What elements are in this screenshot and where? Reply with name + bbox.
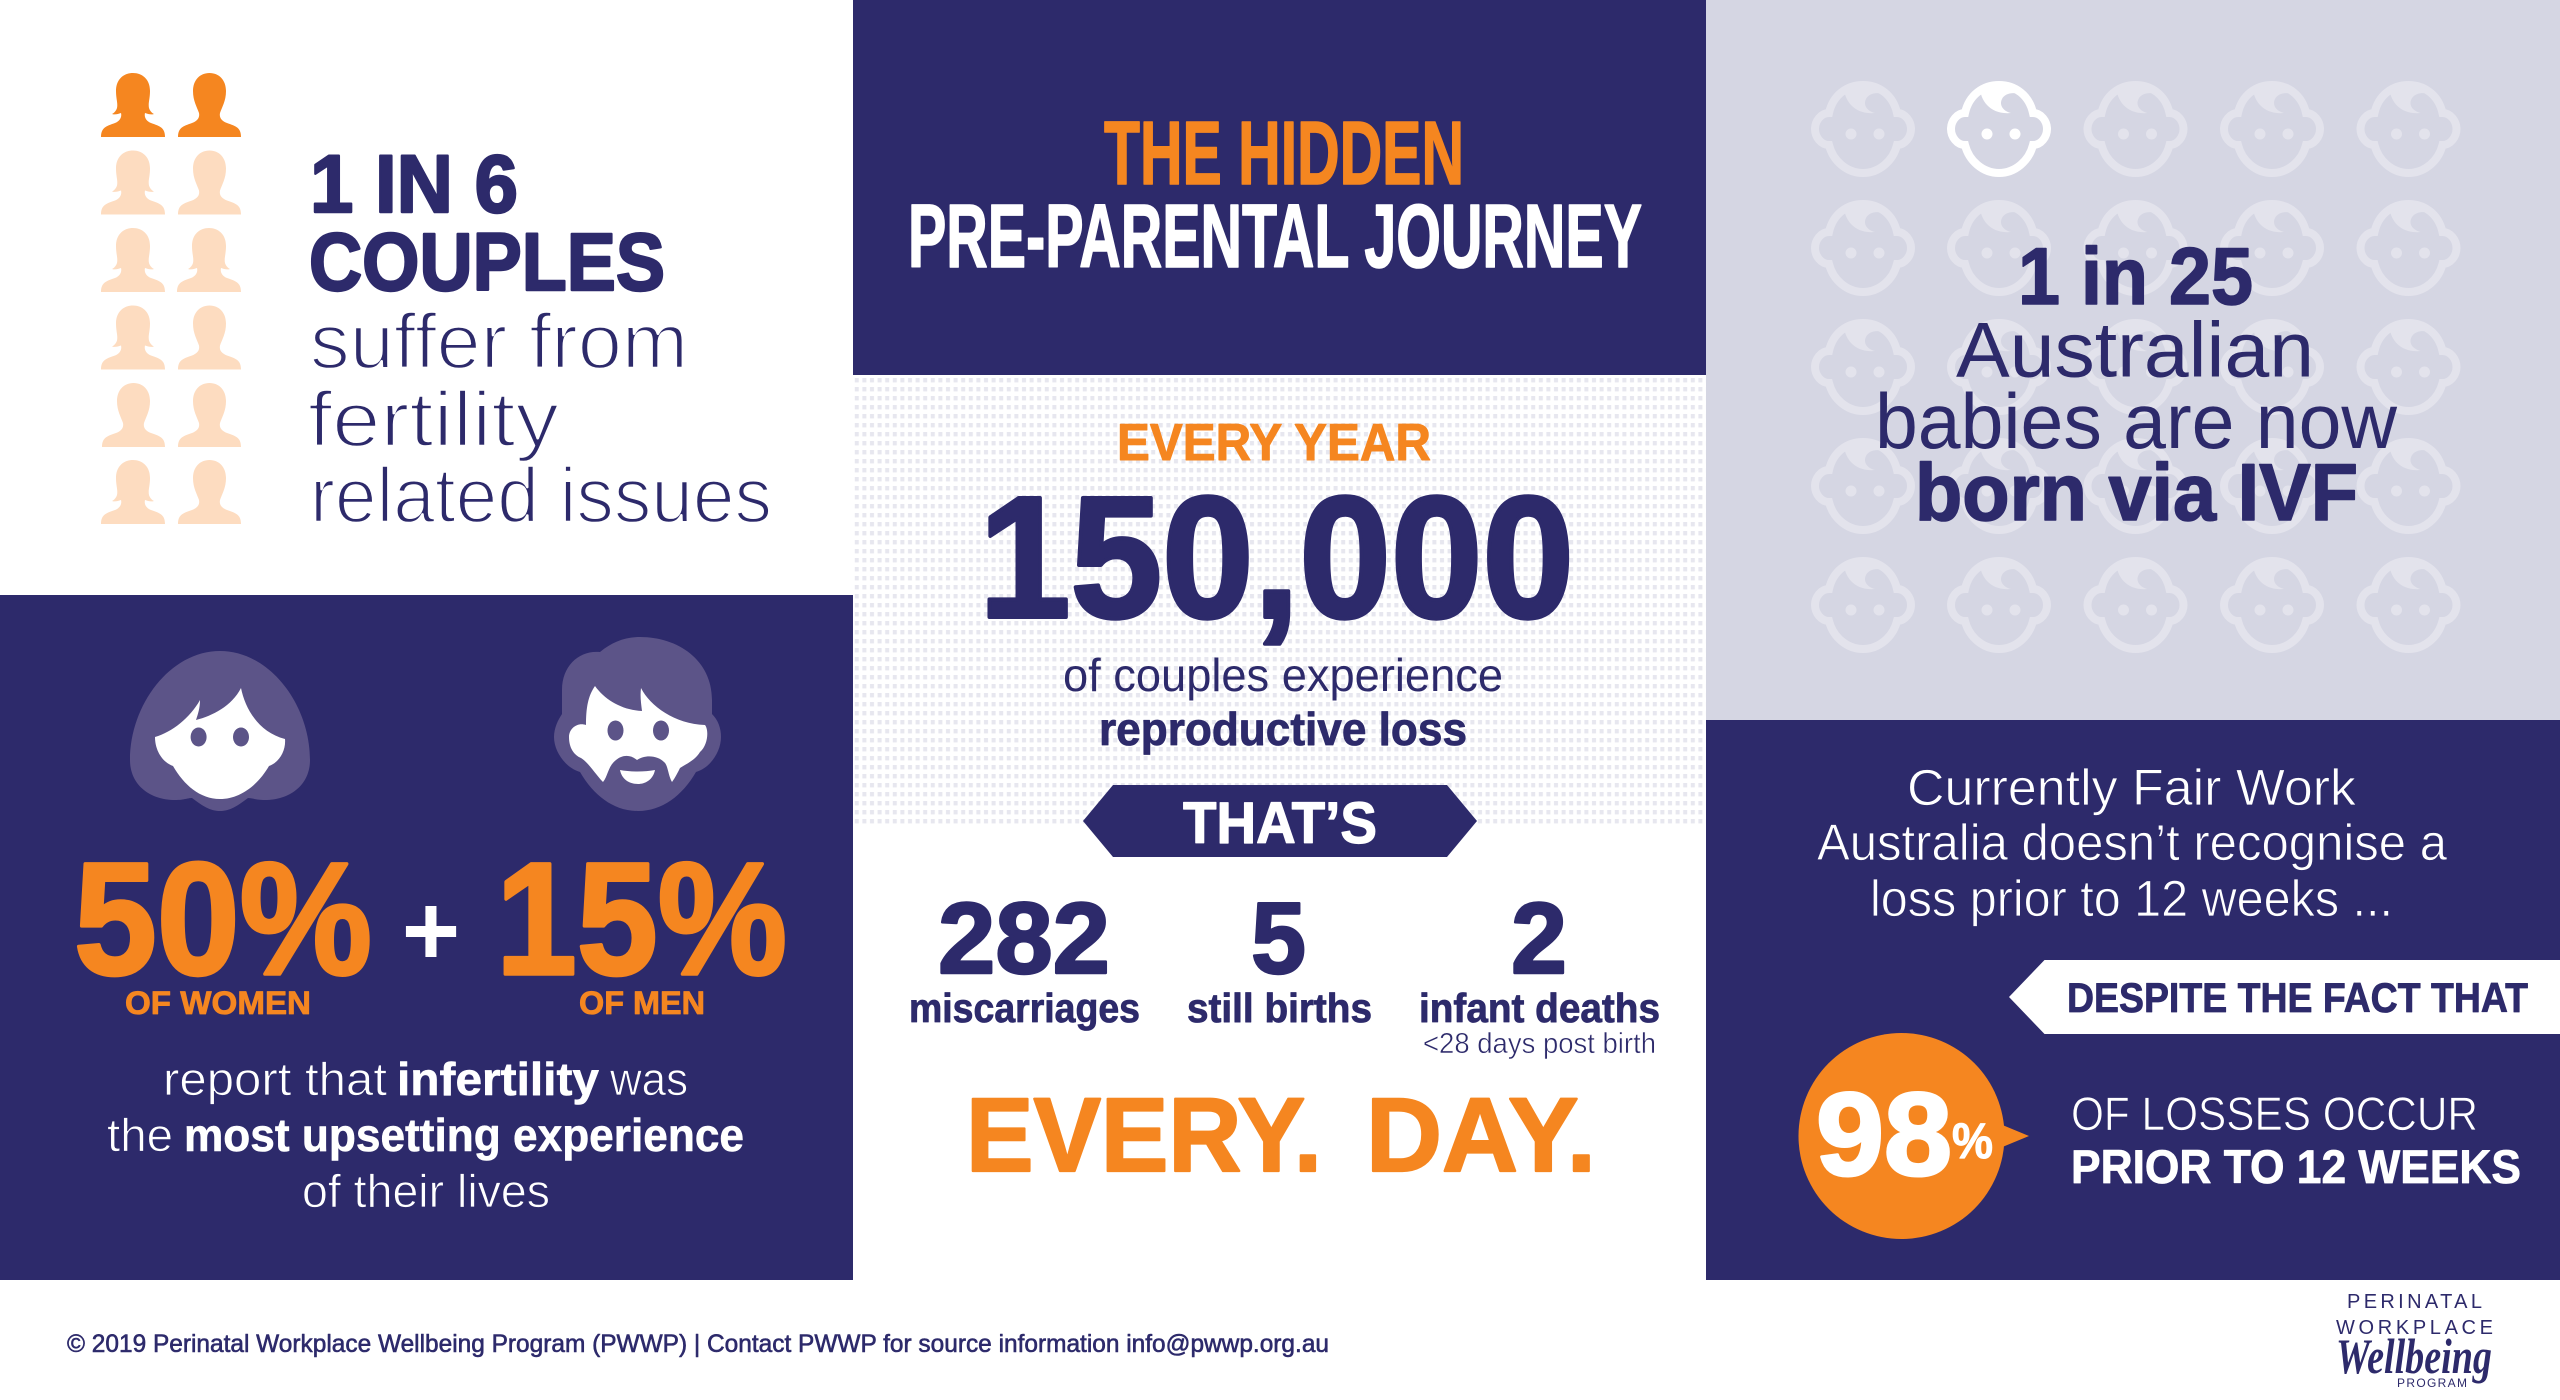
text: every. day.	[966, 1077, 1596, 1194]
text: every. day.: DAY.	[1366, 1077, 1596, 1194]
text: report that infertility was the most upsetting experience: infertility	[397, 1053, 599, 1105]
text: 1 in 25 Australian babies are now born via IVF: Australian	[1956, 306, 2314, 394]
stat: 50% of women: 50%	[74, 829, 372, 1008]
text: currently fair work	[1817, 759, 2448, 927]
text: 1 in 25 Australian babies are now born via IVF	[1875, 232, 2398, 538]
heading: 1 in 6 couples	[309, 139, 665, 308]
text: report that infertility was the most upsetting experience	[107, 1053, 744, 1217]
text: report that infertility was the most upsetting experience: was	[609, 1053, 688, 1105]
text: suffer from fertility related issues	[308, 297, 772, 539]
stat: 2 infant deaths: infant deaths	[1419, 985, 1660, 1031]
panel: 1 in 25 IVF babies	[1706, 0, 2560, 720]
text: report that infertility was the most upsetting experience: the	[107, 1109, 173, 1161]
stat: 15% of men: OF MEN	[579, 985, 705, 1021]
text: report that infertility was the most upsetting experience: of their lives	[302, 1165, 550, 1217]
panel: every year statistics	[853, 375, 1706, 1194]
icon: row of twelve people silhouettes	[101, 73, 241, 524]
panel: fair work losses	[1706, 720, 2560, 1280]
heading: 1 in 6 couples: 1 IN 6	[310, 139, 518, 230]
text: currently fair work: Australia doesn’t recognise a	[1817, 814, 2448, 871]
stat: 282 miscarriages: 282	[938, 883, 1110, 995]
heading: every year: EVERY YEAR	[1117, 414, 1431, 472]
logo: perinatal workplace wellbeing program: PERINATAL	[2347, 1291, 2482, 1313]
text: of losses occur prior to 12 weeks	[2071, 1087, 2521, 1193]
text: of couples experience reproductive loss	[1063, 649, 1503, 755]
text: report that infertility was the most upsetting experience: report that	[163, 1053, 387, 1105]
banner: that's	[1083, 785, 1477, 857]
stat: 5 still births: still births	[1187, 985, 1372, 1031]
text: 1 in 25 Australian babies are now born via IVF: babies are now	[1875, 377, 2398, 465]
logo: perinatal workplace wellbeing program: Wellbeing	[2336, 1328, 2492, 1384]
panel: 1 in 6 couples	[101, 73, 772, 539]
stat: 2 infant deaths: <28 days post birth	[1423, 1028, 1656, 1060]
icon: plus sign: +	[402, 875, 460, 987]
text: report that infertility was the most upsetting experience: most upsetting experience	[184, 1109, 744, 1161]
banner: despite the fact that	[2009, 960, 2560, 1034]
text: of couples experience reproductive loss: reproductive loss	[1099, 703, 1467, 755]
text: 1 in 25 Australian babies are now born via IVF: born via IVF	[1915, 448, 2358, 538]
text: every. day.: EVERY.	[966, 1077, 1322, 1194]
logo: perinatal workplace wellbeing program	[2336, 1291, 2493, 1390]
icon: grid of baby faces	[1815, 85, 2456, 649]
footer: copyright text: © 2019 Perinatal Workplace Wellbeing Program (PWWP) | Contact PWWP for source information info@pwwp.org.au	[67, 1330, 1329, 1358]
logo: perinatal workplace wellbeing program: PROGRAM	[2397, 1376, 2467, 1390]
text: currently fair work: loss prior to 12 weeks ...	[1870, 870, 2393, 927]
stat: 15% of men: 15%	[496, 829, 787, 1008]
icon: woman face	[130, 651, 310, 811]
callout: 98% bubble: 98	[1816, 1069, 1952, 1201]
callout: 98% bubble	[1798, 1033, 2029, 1239]
stat: 2 infant deaths: 2	[1511, 883, 1567, 995]
text: of couples experience reproductive loss: of couples experience	[1063, 649, 1503, 701]
text: suffer from fertility related issues: fertility	[308, 375, 559, 463]
stat: 5 still births: 5	[1251, 883, 1306, 995]
stat: 2 infant deaths	[1419, 883, 1660, 1060]
banner: that's: THAT’S	[1183, 791, 1377, 856]
logo: perinatal workplace wellbeing program: WORKPLACE	[2336, 1317, 2493, 1339]
panel: women and men infertility	[0, 595, 853, 1280]
heading: 1 in 6 couples: COUPLES	[309, 217, 665, 308]
stat: 5 still births	[1187, 883, 1372, 1031]
heading: the hidden: THE HIDDEN	[1104, 104, 1464, 204]
text: currently fair work: Currently Fair Work	[1907, 759, 2357, 816]
icon: man face with beard	[554, 637, 721, 811]
stat: 150,000: 150,000	[979, 460, 1574, 654]
text: of losses occur prior to 12 weeks: PRIOR TO 12 WEEKS	[2071, 1140, 2521, 1193]
panel: title	[853, 0, 1706, 375]
text: of losses occur prior to 12 weeks: OF LOSSES OCCUR	[2071, 1087, 2478, 1140]
callout: 98% bubble: %	[1952, 1113, 1993, 1169]
heading: pre-parental journey: PRE-PARENTAL JOURNEY	[908, 187, 1642, 287]
stat: 282 miscarriages: miscarriages	[909, 985, 1140, 1031]
stat: 50% of women: OF WOMEN	[125, 985, 311, 1021]
text: suffer from fertility related issues: related issues	[310, 451, 772, 539]
text: 1 in 25 Australian babies are now born via IVF: 1 in 25	[2018, 232, 2253, 322]
text: suffer from fertility related issues: suffer from	[310, 297, 688, 385]
stat: 282 miscarriages	[909, 883, 1140, 1031]
